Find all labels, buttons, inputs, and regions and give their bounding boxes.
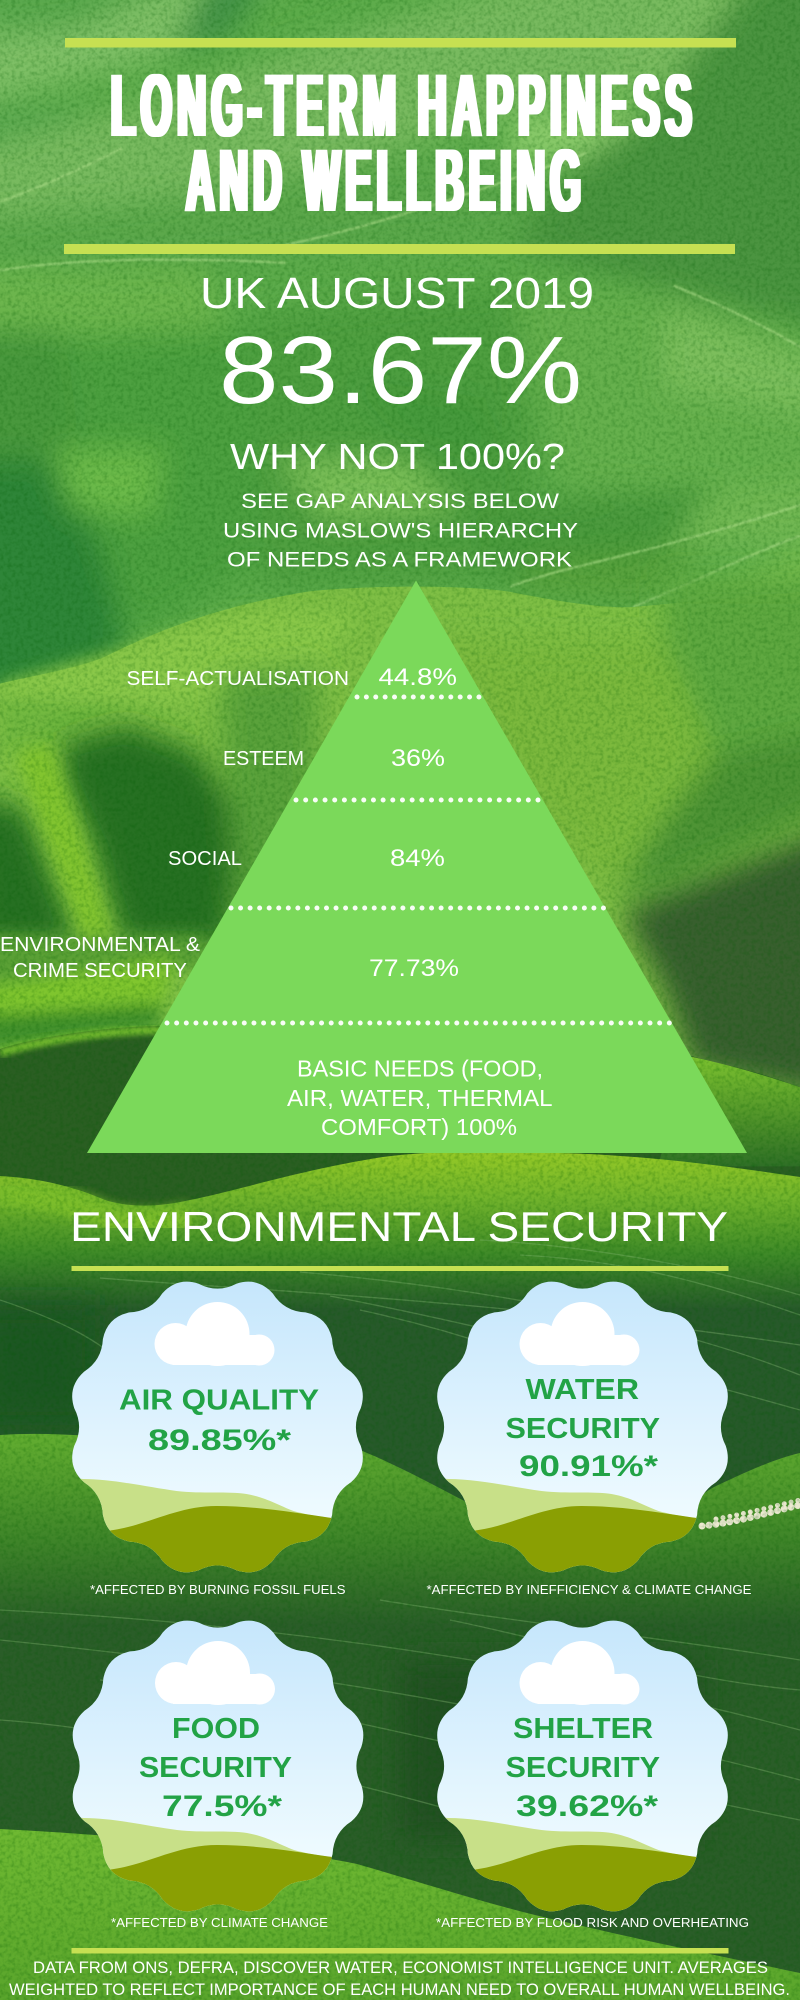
- badge: shelter security: [437, 1620, 728, 1912]
- section divider bar: [72, 1266, 728, 1271]
- footnote: food security: *AFFECTED BY CLIMATE CHANGE: [111, 1916, 328, 1930]
- footnote: water security: *AFFECTED BY INEFFICIENCY & CLIMATE CHANGE: [426, 1583, 752, 1597]
- title: [111, 55, 697, 230]
- tier: esteem: [223, 745, 445, 772]
- icon: cloud: [155, 1641, 275, 1705]
- subtitle: UK August 2019: UK AUGUST 2019: [200, 270, 594, 318]
- tier: environmental and crime security: ENVIRONMENTAL &: [0, 934, 201, 956]
- badge: water security: [437, 1282, 728, 1572]
- icon: cloud: [154, 1302, 274, 1366]
- badge: shelter security: 39.62%*: [516, 1790, 658, 1823]
- tier: self-actualisation: 44.8%: [378, 664, 457, 691]
- pyramid chart: Maslow's hierarchy: [0, 580, 747, 1153]
- icon: cloud: [520, 1302, 640, 1366]
- main central hill: [0, 587, 800, 1224]
- tier: esteem: ESTEEM: [223, 748, 304, 770]
- badge: food security: 77.5%*: [162, 1790, 282, 1823]
- second divider bar: [64, 244, 735, 254]
- tier: basic needs: BASIC NEEDS (FOOD,: [297, 1056, 543, 1082]
- footnote: air quality: *AFFECTED BY BURNING FOSSIL FUELS: [90, 1583, 346, 1597]
- tier: basic needs: COMFORT) 100%: [321, 1114, 517, 1140]
- tier: basic needs: [287, 1056, 553, 1140]
- tier dividers: [167, 697, 670, 1023]
- footer divider bar: [72, 1948, 728, 1954]
- sheep: [702, 1500, 800, 1526]
- badge: air quality: [72, 1282, 363, 1572]
- footer: data sources: [9, 1959, 790, 1999]
- tier: social: SOCIAL: [168, 848, 242, 870]
- badge: air quality: AIR QUALITY: [119, 1384, 319, 1416]
- badge: food security: [72, 1620, 364, 1912]
- tier: social: 84%: [390, 845, 445, 872]
- badge: air quality: 89.85%*: [148, 1424, 291, 1457]
- badge: shelter security: SHELTER: [513, 1713, 653, 1745]
- footer: data sources: WEIGHTED TO REFLECT IMPORTANCE OF EACH HUMAN NEED TO OVERALL HUMAN WELLBEING.: [9, 1981, 790, 1999]
- badge: food security: SECURITY: [139, 1752, 292, 1784]
- tier: esteem: 36%: [391, 745, 445, 772]
- tier: environmental and crime security: 77.73%: [369, 955, 459, 982]
- tier: social: [168, 845, 445, 872]
- tier: environmental and crime security: [0, 934, 459, 982]
- footer: data sources: DATA FROM ONS, DEFRA, DISCOVER WATER, ECONOMIST INTELLIGENCE UNIT. AVERAGES: [33, 1959, 768, 1977]
- badge: water security: SECURITY: [506, 1413, 660, 1445]
- badge: water security: 90.91%*: [519, 1450, 658, 1483]
- tier: self-actualisation: SELF-ACTUALISATION: [126, 668, 349, 690]
- intro text block: [223, 490, 578, 572]
- tier: basic needs: AIR, WATER, THERMAL: [287, 1085, 553, 1111]
- intro text block: OF NEEDS AS A FRAMEWORK: [227, 548, 572, 572]
- badge: shelter security: SECURITY: [506, 1752, 660, 1784]
- back hill behind pyramid: [0, 1026, 800, 1314]
- hill with sheep: [0, 1434, 800, 1640]
- intro text block: USING MASLOW'S HIERARCHY: [223, 520, 578, 542]
- badge: food security: FOOD: [172, 1713, 260, 1745]
- ridge highlights: [0, 148, 800, 607]
- section heading: environmental security: ENVIRONMENTAL SECURITY: [70, 1203, 728, 1250]
- question heading: WHY NOT 100%?: [230, 436, 565, 477]
- footnote: shelter security: *AFFECTED BY FLOOD RISK AND OVERHEATING: [436, 1916, 749, 1930]
- badge: water security: WATER: [526, 1374, 639, 1406]
- ripple lines: [0, 1240, 800, 1860]
- tier: self-actualisation: [126, 664, 457, 691]
- icon: cloud: [520, 1641, 640, 1705]
- top divider bar: [65, 38, 736, 48]
- headline figure: 83.67%: [219, 317, 582, 424]
- tier: environmental and crime security: CRIME SECURITY: [13, 960, 187, 982]
- foreground hill: [0, 1152, 800, 1312]
- intro text block: SEE GAP ANALYSIS BELOW: [241, 490, 559, 513]
- bottom hill: [0, 1829, 800, 2000]
- pyramid shape: [87, 580, 747, 1153]
